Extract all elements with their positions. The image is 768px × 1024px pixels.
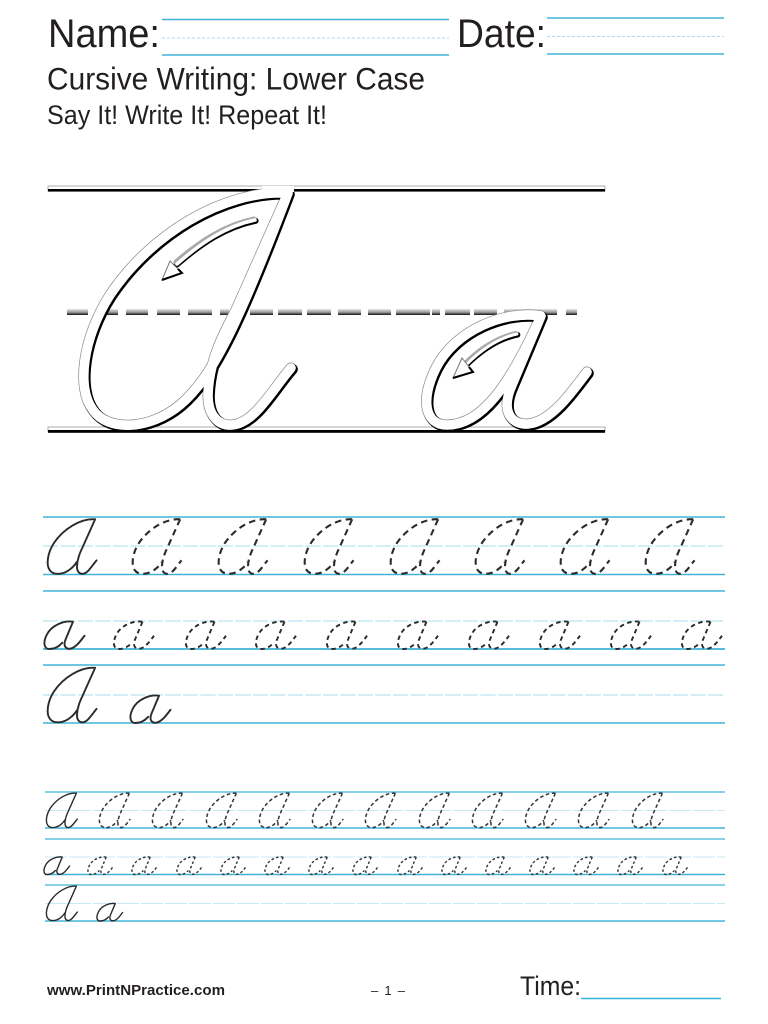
page number: – 1 – <box>371 983 406 998</box>
arrow: lowercase stroke direction <box>453 333 518 378</box>
writing lines: name <box>162 20 449 55</box>
row: capital and lowercase model pair <box>48 668 170 723</box>
guide lines: large rows <box>43 517 725 723</box>
bottom guide line <box>48 427 605 433</box>
top guide line <box>48 186 605 192</box>
footer <box>46 971 721 1001</box>
arrow: capital stroke direction <box>162 219 256 280</box>
row: small lowercase a model and tracing <box>44 857 689 874</box>
row: small capital and lowercase model pair <box>46 886 123 921</box>
row: lowercase a model and tracing <box>44 621 722 649</box>
label: Time: Time: <box>520 971 581 1001</box>
guide lines: small rows <box>45 792 725 921</box>
website: www.PrintNPractice.com <box>46 983 225 999</box>
label: Date: Date: <box>457 12 546 56</box>
header: name and date fields <box>48 12 724 56</box>
large outline lowercase a <box>427 315 588 426</box>
practice section: large rows <box>43 517 725 723</box>
title: Cursive Writing: Lower Case <box>47 60 425 96</box>
dashed midline <box>67 309 577 315</box>
large outline capital A <box>84 186 294 427</box>
subtitle: Say It! Write It! Repeat It! <box>47 100 327 130</box>
practice section: small rows <box>44 792 725 921</box>
time line <box>581 998 721 1000</box>
writing lines: date <box>547 18 724 54</box>
label: Name: Name: <box>48 12 160 56</box>
row: capital A model and tracing <box>48 519 695 574</box>
panel: large letter demonstration <box>48 186 605 433</box>
row: small capital A model and tracing <box>46 793 663 828</box>
